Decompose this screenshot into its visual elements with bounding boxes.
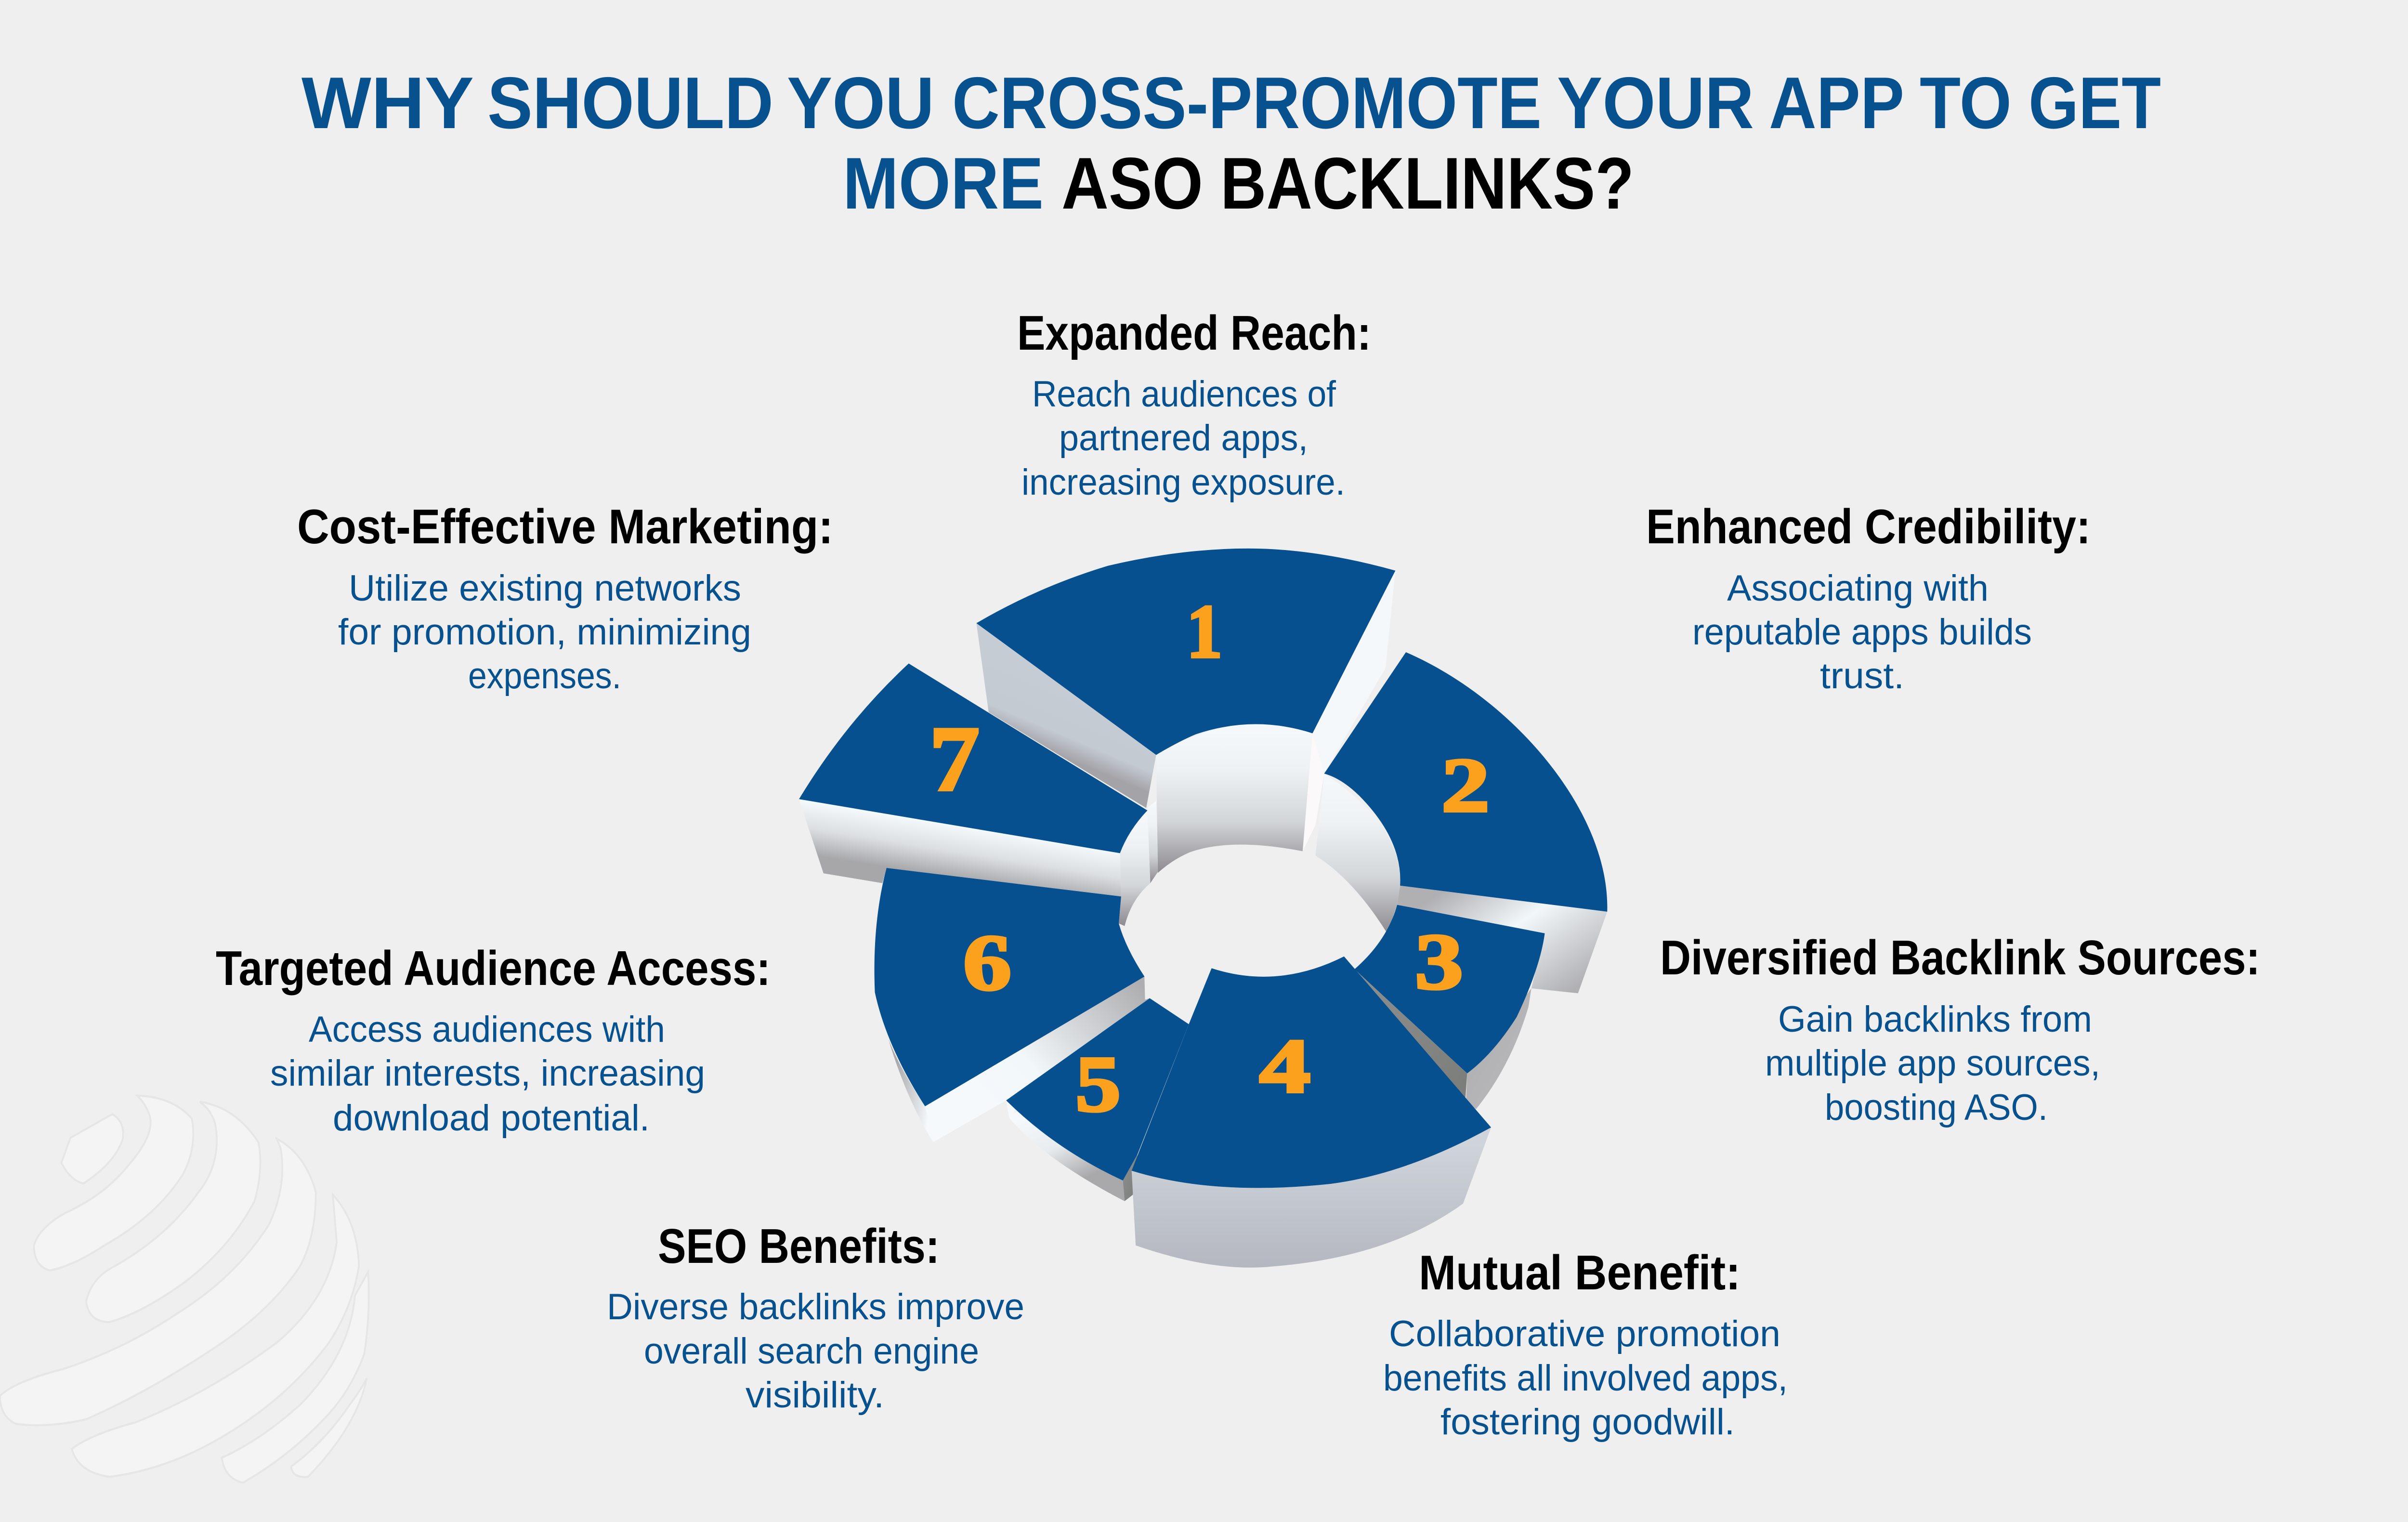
description: Diversified Backlink Sources: [1765, 999, 2100, 1128]
description: Mutual Benefit: [1383, 1313, 1788, 1443]
title: SHOULD: [487, 62, 773, 144]
description: Mutual Benefit: benefits all involved apps,: [1383, 1358, 1788, 1399]
description: Expanded Reach: Reach audiences of: [1032, 374, 1336, 415]
segment 2: 2: [1441, 742, 1490, 828]
description: Cost-Effective Marketing: [338, 568, 751, 696]
segment 2: [1315, 652, 1607, 993]
3D segmented ring chart: [799, 549, 1607, 1268]
description: Expanded Reach: [1021, 374, 1345, 503]
description: Expanded Reach: increasing exposure.: [1021, 462, 1345, 503]
decorative globe watermark: [0, 1096, 369, 1483]
segment 1: 1: [1187, 590, 1222, 674]
heading: SEO Benefits: SEO Benefits:: [658, 1220, 940, 1273]
title: WHY: [301, 62, 474, 144]
title: YOUR: [1557, 62, 1754, 144]
description: Expanded Reach: partnered apps,: [1059, 418, 1308, 459]
description: Mutual Benefit: fostering goodwill.: [1440, 1402, 1735, 1443]
description: SEO Benefits: overall search engine: [644, 1331, 979, 1372]
text block: Expanded Reach: [1017, 306, 1371, 503]
description: Cost-Effective Marketing: expenses.: [468, 656, 621, 696]
description: SEO Benefits: Diverse backlinks improve: [607, 1286, 1024, 1327]
description: Enhanced Credibility: trust.: [1820, 656, 1904, 696]
description: Targeted Audience Access: Access audiences with: [309, 1009, 665, 1050]
segment 1: [976, 549, 1395, 883]
segment 6: [875, 868, 1150, 1142]
description: Enhanced Credibility: Associating with: [1727, 568, 1989, 609]
description: Targeted Audience Access: [270, 1009, 705, 1139]
heading: Mutual Benefit: Mutual Benefit:: [1419, 1246, 1741, 1300]
title: CROSS-PROMOTE: [952, 62, 1542, 144]
segment 7: 7: [929, 708, 980, 810]
segment 5: 5: [1075, 1040, 1121, 1128]
description: Diversified Backlink Sources: multiple app sources,: [1765, 1043, 2100, 1084]
heading: Cost-Effective Marketing: Cost-Effective Marketing:: [297, 500, 833, 554]
segment 7: [799, 664, 1150, 926]
text block: Diversified Backlink Sources: [1660, 931, 2260, 1128]
title: [301, 62, 2161, 224]
description: Diversified Backlink Sources: boosting ASO.: [1825, 1087, 2048, 1128]
title: ASO: [1061, 143, 1203, 224]
text block: Cost-Effective Marketing: [297, 500, 833, 696]
segment 5: [1006, 998, 1189, 1201]
heading: Diversified Backlink Sources: Diversified Backlink Sources:: [1660, 931, 2260, 985]
segment 3: 3: [1415, 918, 1463, 1006]
heading: Enhanced Credibility: Enhanced Credibility:: [1646, 500, 2091, 554]
title: YOU: [787, 62, 934, 144]
title: APP: [1769, 62, 1904, 144]
description: Enhanced Credibility: [1692, 568, 2032, 696]
segment 3: [1355, 905, 1545, 1109]
description: Targeted Audience Access: download potential.: [333, 1098, 650, 1139]
heading: Targeted Audience Access: Targeted Audience Access:: [216, 942, 771, 996]
segment 4: 4: [1259, 1023, 1310, 1109]
text block: Mutual Benefit: [1383, 1246, 1788, 1443]
text block: SEO Benefits: [607, 1220, 1024, 1416]
description: Mutual Benefit: Collaborative promotion: [1389, 1313, 1780, 1354]
title: MORE: [843, 143, 1044, 224]
text block: Targeted Audience Access: [216, 942, 771, 1139]
text block: Enhanced Credibility: [1646, 500, 2091, 696]
segment 6: 6: [963, 918, 1011, 1007]
segment 4: [1132, 957, 1491, 1268]
description: Cost-Effective Marketing: for promotion, minimizing: [338, 612, 751, 653]
title: GET: [2028, 62, 2161, 144]
description: Cost-Effective Marketing: Utilize existing networks: [349, 568, 741, 609]
description: Enhanced Credibility: reputable apps builds: [1692, 612, 2032, 653]
heading: Expanded Reach: Expanded Reach:: [1017, 306, 1371, 360]
description: SEO Benefits: visibility.: [746, 1375, 884, 1416]
description: Targeted Audience Access: similar interests, increasing: [270, 1053, 705, 1094]
title: BACKLINKS?: [1220, 143, 1634, 224]
description: SEO Benefits: [607, 1286, 1024, 1416]
title: TO: [1920, 62, 2012, 144]
description: Diversified Backlink Sources: Gain backlinks from: [1778, 999, 2092, 1040]
